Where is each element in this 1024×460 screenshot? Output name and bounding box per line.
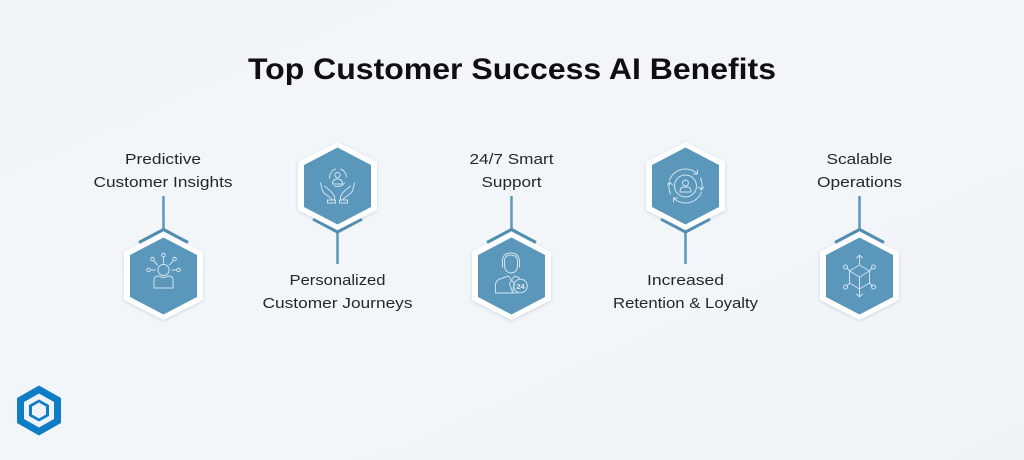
connector xyxy=(661,219,710,264)
hexagon xyxy=(646,142,725,230)
label: Scalable xyxy=(826,151,892,168)
label: Customer Insights xyxy=(94,174,232,191)
label: Retention & Loyalty xyxy=(613,295,759,312)
label xyxy=(470,151,554,191)
hexagon xyxy=(472,232,551,320)
logo xyxy=(17,386,61,436)
benefit 5: Scalable Operations xyxy=(817,151,902,320)
connector xyxy=(139,196,188,242)
label xyxy=(262,272,412,312)
connector xyxy=(835,196,884,242)
icon: hands holding person xyxy=(320,169,354,203)
hexagon xyxy=(298,142,377,230)
label: Customer Journeys xyxy=(262,295,412,312)
icon: support agent with 24 badge xyxy=(496,253,527,293)
benefit 2: Personalized Customer Journeys xyxy=(262,142,412,312)
label: Operations xyxy=(817,174,902,191)
label: Increased xyxy=(647,272,724,289)
icon: person with network nodes xyxy=(147,253,180,288)
connector xyxy=(313,219,362,264)
benefit 4: Increased Retention & Loyalty xyxy=(613,142,759,312)
icon: scaling cube xyxy=(844,255,876,297)
label xyxy=(94,151,232,191)
icon: person in circular arrows xyxy=(668,169,704,203)
hexagon xyxy=(124,232,203,320)
label: 24/7 Smart xyxy=(470,151,554,168)
label: Personalized xyxy=(290,272,386,289)
title: Top Customer Success AI Benefits xyxy=(248,53,776,86)
label: Predictive xyxy=(125,151,201,168)
benefit 3: 24/7 Smart Support xyxy=(470,151,554,320)
connector xyxy=(487,196,536,242)
icon text: 24: 24 xyxy=(516,282,525,291)
label xyxy=(613,272,759,312)
hexagon xyxy=(820,232,899,320)
label: Support xyxy=(482,174,542,191)
benefit 1: Predictive Customer Insights xyxy=(94,151,232,320)
label xyxy=(817,151,902,191)
